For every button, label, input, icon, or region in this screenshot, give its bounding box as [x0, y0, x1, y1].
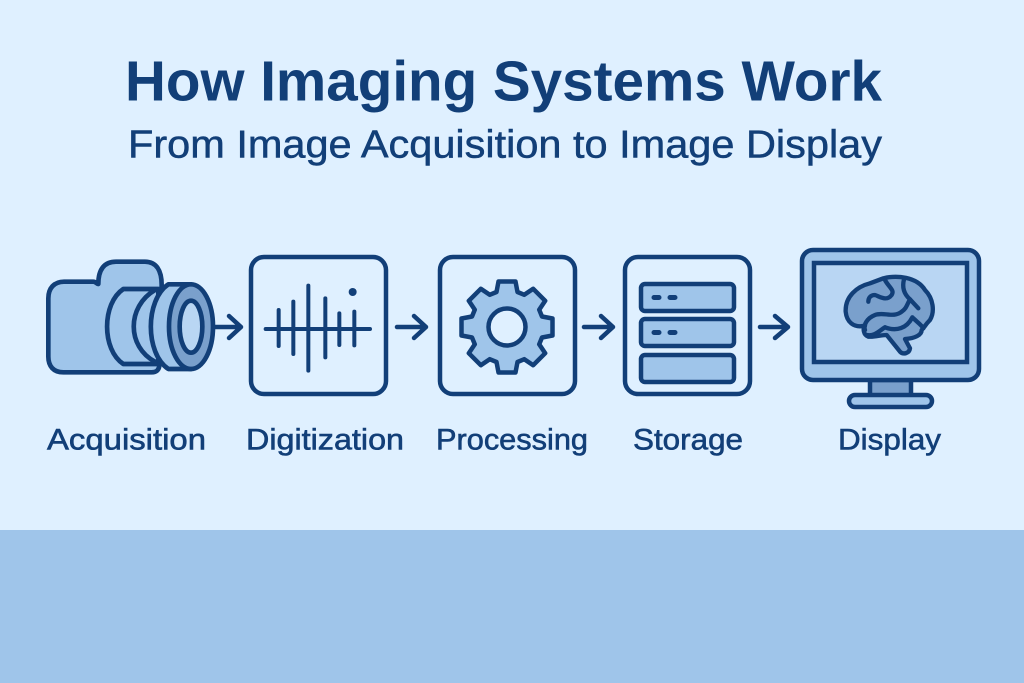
label: digitization: Digitization	[246, 424, 404, 456]
subtitle: From Image Acquisition to Image Display	[128, 124, 883, 166]
icon: storage server	[625, 257, 750, 394]
label: display: Display	[838, 424, 941, 456]
arrow: acquisition to digitization	[215, 316, 241, 338]
icon: camera	[48, 262, 213, 372]
icon: digitization waveform	[251, 257, 386, 394]
label: processing: Processing	[436, 424, 588, 456]
arrow: processing to storage	[584, 316, 613, 338]
icon: processing gear	[440, 257, 575, 394]
label: storage: Storage	[633, 424, 743, 456]
arrow: storage to display	[760, 316, 788, 338]
icon: display monitor with brain	[802, 250, 979, 407]
arrow: digitization to processing	[397, 316, 426, 338]
bottom band	[0, 530, 1024, 683]
label: acquisition: Acquisition	[47, 424, 206, 456]
title: How Imaging Systems Work	[125, 50, 882, 114]
